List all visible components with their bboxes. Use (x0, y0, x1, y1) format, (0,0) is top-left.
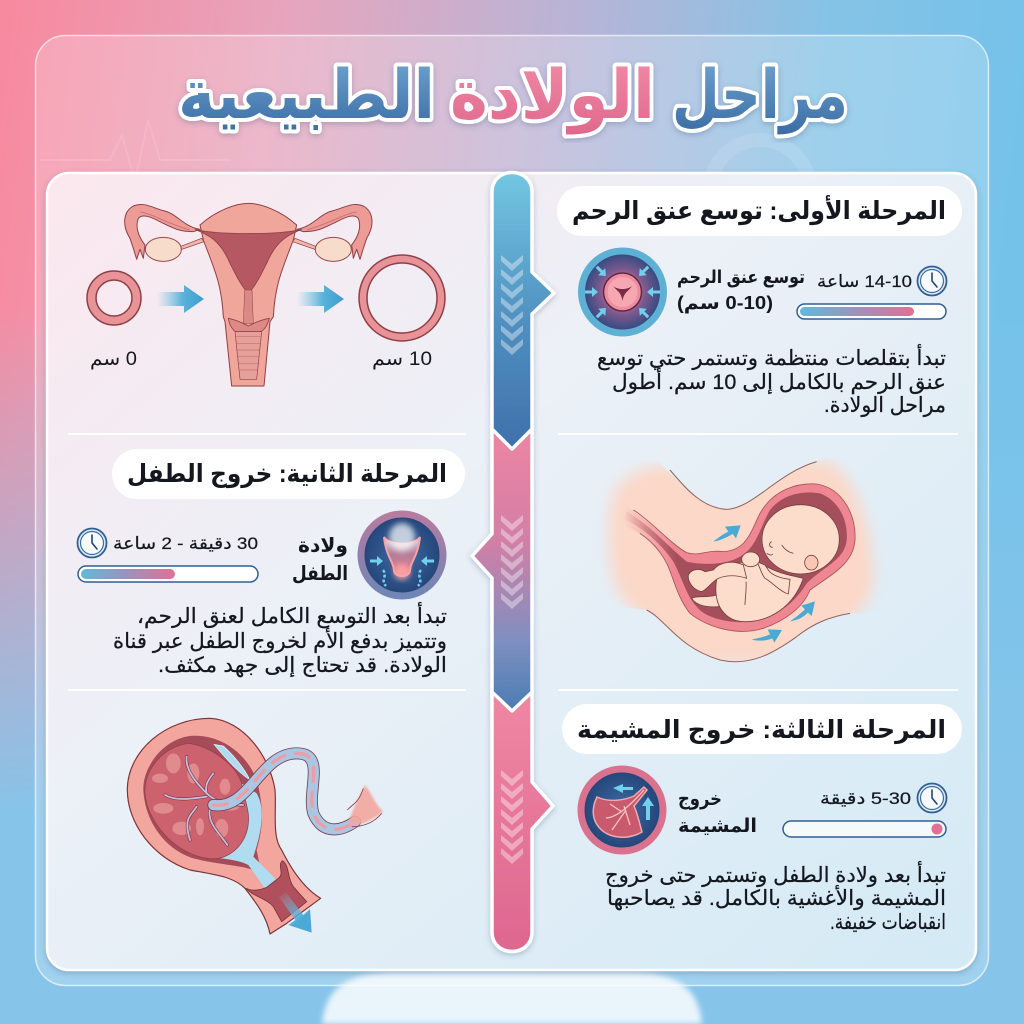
body text: المشيمة والأغشية بالكامل. قد يصاحبها (607, 885, 946, 910)
cervix (246, 861, 307, 922)
cervix (228, 318, 269, 332)
ear (805, 555, 818, 570)
body text: وتتميز بدفع الأم لخروج الطفل عبر قناة (113, 628, 447, 654)
placenta (145, 743, 249, 859)
illustration: cervix dilation and uterus (87, 203, 445, 386)
bottom glow (322, 972, 702, 1024)
body text: الولادة. قد تحتاج إلى جهد مكثف. (158, 654, 447, 678)
label: placenta delivery: المشيمة (678, 816, 757, 837)
head (762, 505, 839, 574)
ring: 10 cm (363, 259, 441, 337)
uterus body (200, 203, 297, 386)
illustration: placenta delivery (127, 718, 383, 934)
icon: baby delivery (361, 514, 443, 596)
fetus face (745, 542, 793, 605)
progress bar (783, 821, 946, 837)
uterine fluid (190, 783, 277, 888)
body text: انقباضات خفيفة. (830, 911, 946, 934)
label: cervix dilation (677, 267, 805, 313)
main content panel (47, 173, 976, 970)
body text: مراحل الولادة. (824, 394, 946, 417)
central timeline (472, 172, 554, 952)
umbilical cord (213, 753, 355, 829)
upper leg (688, 562, 747, 592)
ring outlines: 0 cm (87, 271, 141, 325)
label: cervix dilation: توسع عنق الرحم (677, 267, 805, 288)
body text: تبدأ بتقلصات منتظمة وتستمر حتي توسع (597, 344, 946, 370)
heading: stage 1: المرحلة الأولى: توسع عنق الرحم (572, 195, 946, 226)
placenta vessels highlight (165, 757, 243, 845)
title: الولادة (450, 57, 655, 135)
label: baby delivery (292, 535, 348, 585)
hand (742, 552, 760, 567)
torso (716, 562, 803, 622)
body text (597, 344, 946, 417)
cord end tissue (348, 785, 383, 825)
wall outline (633, 484, 855, 631)
arm (757, 562, 790, 594)
heading: stage 3: المرحلة الثالثة: خروج المشيمة (577, 716, 946, 745)
icon: clock (918, 266, 946, 296)
panel: stage 1 (557, 186, 962, 417)
ring: 0 cm (92, 276, 136, 320)
icon: clock (918, 784, 946, 812)
title: الطبيعية (178, 57, 435, 133)
fetus (688, 505, 839, 622)
tissue outlines (647, 462, 850, 662)
title (178, 57, 848, 135)
title: مراحل (672, 57, 848, 135)
vaginal canal (235, 332, 262, 379)
uterine cavity (143, 736, 262, 870)
icon: placenta delivery (581, 769, 663, 851)
label: placenta delivery (678, 789, 757, 837)
icon: clock (78, 528, 106, 558)
uterine tubes and ovaries (125, 204, 372, 261)
progress bar (797, 304, 946, 319)
heading: stage 2: المرحلة الثانية: خروج الطفل (127, 460, 447, 489)
detachment highlight (214, 744, 250, 780)
heading: stage 1 (557, 186, 962, 236)
panel: stage 2 (78, 449, 465, 678)
uterine cavity (195, 229, 302, 293)
label: 10 cm: 10 سم (372, 349, 432, 370)
uterine wall (623, 484, 855, 631)
label: placenta delivery: خروج (678, 789, 722, 810)
amniotic cavity (623, 492, 847, 622)
duration: 30 دقيقة - 2 ساعة (113, 534, 258, 553)
label: baby delivery: الطفل (292, 563, 348, 585)
heading: stage 3 (562, 704, 962, 754)
heading: stage 2 (112, 449, 465, 499)
placenta lobes (152, 753, 239, 838)
contraction arrows (713, 525, 815, 643)
body text: تبدأ بعد ولادة الطفل وتستمر حتى خروج (605, 861, 946, 888)
cervical canal (243, 290, 253, 323)
ring outlines: 10 cm (359, 255, 445, 341)
arrow: left (157, 285, 204, 313)
arrow: right (297, 285, 344, 313)
body text: عنق الرحم بالكامل إلى 10 سم. أطول (612, 368, 946, 395)
timeline segment 3 (492, 686, 553, 952)
body text (113, 602, 447, 678)
uterus wall (127, 718, 321, 934)
panel: stage 3 (562, 704, 962, 934)
label: 0 cm: 0 سم (90, 349, 137, 370)
duration: 14-10 ساعة (817, 272, 912, 291)
label: cervix dilation: (0-10 سم) (677, 293, 773, 313)
duration: 5-30 دقيقة (820, 789, 911, 808)
body text (605, 861, 946, 934)
body text: تبدأ بعد التوسع الكامل لعنق الرحم، (137, 602, 447, 629)
lower leg (692, 595, 727, 607)
label: baby delivery: ولادة (298, 535, 348, 557)
cord end outline (347, 788, 382, 827)
delivery arrow (279, 893, 312, 933)
section dividers (68, 434, 958, 690)
surrounding tissue (609, 460, 873, 663)
progress bar (78, 566, 258, 582)
timeline segment 1 (492, 172, 554, 449)
timeline segment 2 (472, 428, 532, 711)
placenta vessels (165, 757, 243, 845)
icon: cervix dilation (582, 251, 664, 333)
illustration: fetus in birth canal (609, 460, 873, 663)
